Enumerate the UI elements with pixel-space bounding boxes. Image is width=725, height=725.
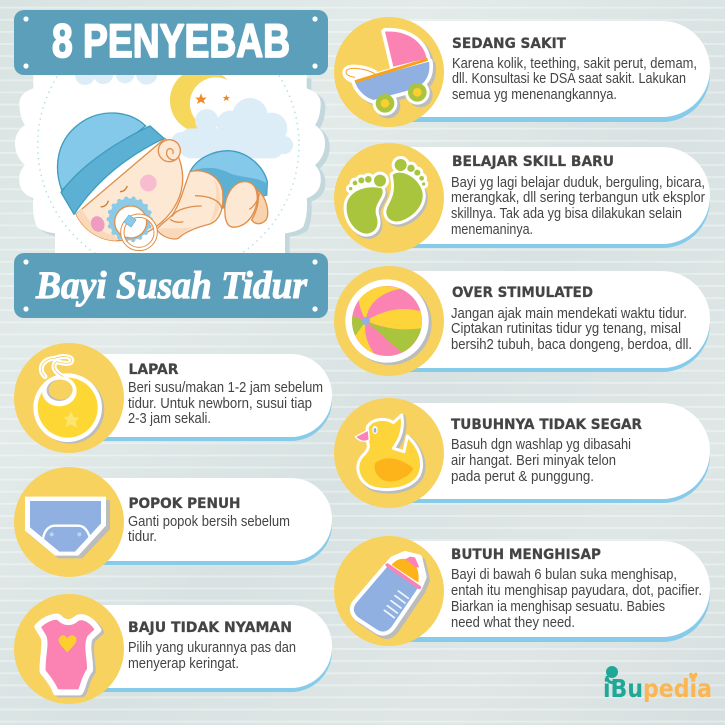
text: tubuhnya tidak segar: Basuh dgn washlap yg dibasahi [451, 437, 631, 453]
text: over stimulated: Ciptakan rutinitas tidur yg tenang, misal [451, 321, 681, 337]
text: butuh menghisap: Biarkan ia menghisap sesuatu. Babies [451, 599, 665, 615]
heading: tubuhnya tidak segar: TUBUHNYA TIDAK SEGAR [451, 417, 642, 433]
panel: popok penuh [14, 467, 332, 577]
panel: baju tidak nyaman [14, 594, 332, 704]
panel: sedang sakit [334, 17, 710, 127]
text: belajar skill baru: skillnya. Tak ada yg bisa dilakukan selain [451, 206, 682, 222]
illustration: sleeping baby badge [15, 14, 330, 276]
logo: ibupedia: pedia [643, 674, 712, 703]
text: butuh menghisap: Bayi di bawah 6 bulan suka menghisap, [451, 567, 677, 583]
text: popok penuh: Ganti popok bersih sebelum [128, 514, 290, 530]
text: popok penuh: tidur. [128, 529, 157, 545]
heading: belajar skill baru: BELAJAR SKILL BARU [452, 154, 614, 170]
heading: sedang sakit: SEDANG SAKIT [452, 36, 566, 52]
logo: ibupedia [603, 666, 712, 703]
text: baju tidak nyaman [128, 640, 296, 672]
text: belajar skill baru: merangkak, dll sering terbangun utk eksplor [451, 190, 705, 206]
text: butuh menghisap [451, 567, 702, 631]
text: over stimulated [451, 306, 692, 353]
panel: belajar skill baru [334, 143, 710, 253]
subtitle banner [14, 253, 328, 318]
text: tubuhnya tidak segar [451, 437, 631, 485]
text: lapar [128, 380, 323, 427]
heading: lapar: LAPAR [128, 362, 178, 378]
icon: baby footprints [347, 159, 425, 236]
heading: butuh menghisap: BUTUH MENGHISAP [451, 547, 601, 563]
icon: diaper [25, 497, 110, 558]
heading: over stimulated: OVER STIMULATED [452, 285, 593, 301]
text: sedang sakit: semua yg menenangkannya. [452, 87, 617, 103]
text: lapar: tidur. Untuk newborn, susui tiap [128, 396, 312, 412]
text: sedang sakit: dll. Konsultasi ke DSA saat sakit. Lakukan [452, 71, 686, 87]
heading: baju tidak nyaman: BAJU TIDAK NYAMAN [128, 620, 292, 636]
text: butuh menghisap: need what they need. [451, 615, 575, 631]
text: over stimulated: bersih2 tubuh, baca dongeng, berdoa, dll. [451, 337, 692, 353]
text: tubuhnya tidak segar: pada perut & punggung. [451, 469, 594, 485]
text: belajar skill baru [451, 175, 705, 238]
text: over stimulated: Jangan ajak main mendekati waktu tidur. [451, 306, 687, 322]
title banner: 8 PENYEBAB [52, 14, 290, 67]
panel: over stimulated [334, 266, 710, 376]
title banner [14, 10, 328, 75]
text: butuh menghisap: entah itu menghisap payudara, dot, pacifier. [451, 583, 702, 599]
text: sedang sakit [452, 56, 697, 103]
icon: beach ball [345, 279, 432, 365]
icon: stroller [346, 32, 432, 115]
text: lapar: 2-3 jam sekali. [128, 411, 211, 427]
text: tubuhnya tidak segar: air hangat. Beri minyak telon [451, 453, 616, 469]
text: lapar: Beri susu/makan 1-2 jam sebelum [128, 380, 323, 396]
icon: bib [33, 357, 104, 444]
text: baju tidak nyaman: menyerap keringat. [128, 656, 239, 672]
panel: butuh menghisap [334, 536, 710, 646]
logo: ibupedia: iBu [603, 674, 643, 703]
heading: popok penuh: POPOK PENUH [128, 496, 240, 512]
text: belajar skill baru: menemaninya. [451, 222, 533, 238]
icon: baby bottle [354, 555, 426, 635]
panel: tubuhnya tidak segar [334, 398, 710, 508]
panel: lapar [14, 343, 332, 453]
text: popok penuh [128, 514, 290, 545]
text: sedang sakit: Karena kolik, teething, sakit perut, demam, [452, 56, 697, 72]
subtitle banner: Bayi Susah Tidur [35, 264, 308, 307]
icon: rubber duck [355, 415, 424, 492]
text: baju tidak nyaman: Pilih yang ukurannya pas dan [128, 640, 296, 656]
icon: onesie [37, 617, 101, 694]
